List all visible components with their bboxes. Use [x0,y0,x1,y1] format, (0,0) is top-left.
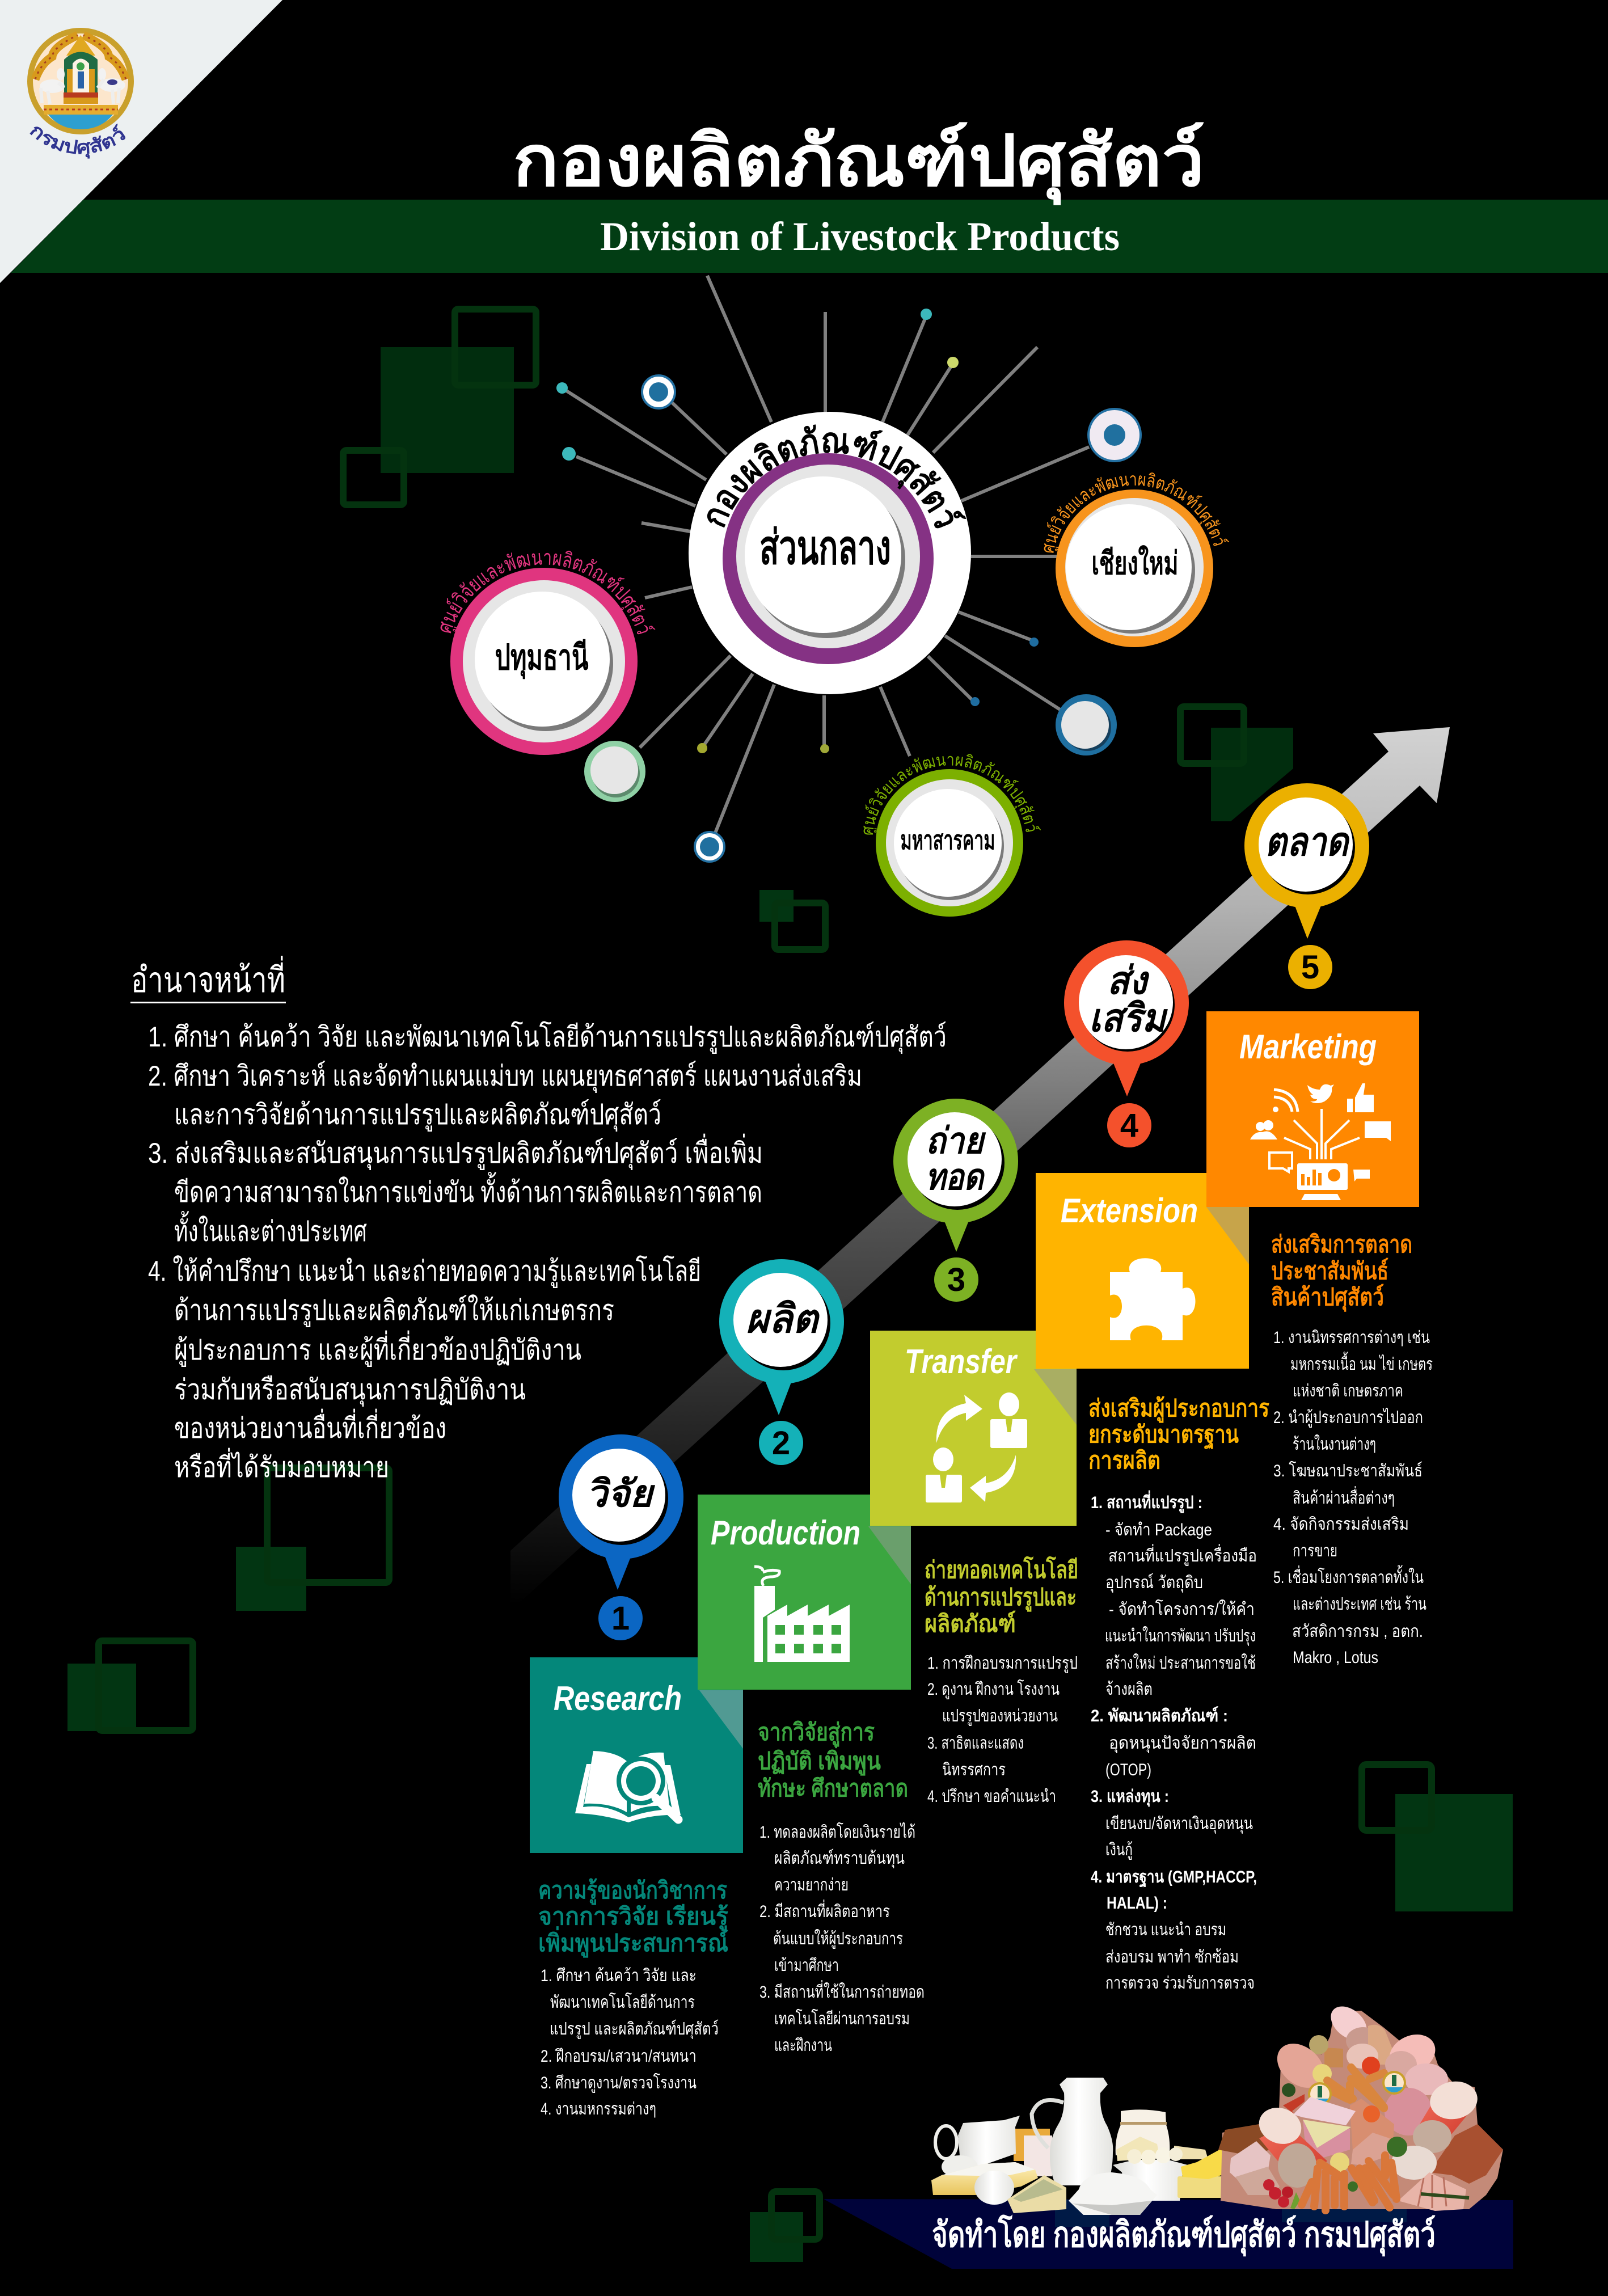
centre: Chiang Mai [1044,472,1230,647]
centre: Maha Sarakham: มหาสารคาม [901,825,995,855]
extension list: (OTOP) [1105,1761,1151,1779]
production heading: ทักษะ ศึกษาตลาด [758,1775,908,1801]
extension list: 1. สถานที่แปรรูป : [1091,1490,1202,1513]
production list: ผลิตภัณฑ์ทราบต้นทุน [774,1848,905,1869]
extension list: ชักชวน แนะนำ อบรม [1105,1921,1226,1939]
production list: เทคโนโลยีผ่านการอบรม [774,2008,910,2028]
centre: Chiang Mai: ศูนย์วิจัยและพัฒนาผลิตภัณฑ์ปศุสัตว์ [1044,472,1230,553]
transfer list: 4. ปรึกษา ขอคำแนะนำ [927,1787,1056,1806]
centre: Pathum Thani [440,550,656,755]
duties list: ขีดความสามารถในการแข่งขัน ทั้งด้านการผลิตและการตลาด [174,1172,762,1208]
footer credit: จัดทำโดย กองผลิตภัณฑ์ปศุสัตว์ กรมปศุสัตว์ [932,2214,1436,2256]
transfer list: 2. ดูงาน ฝึกงาน โรงงาน [927,1679,1060,1699]
logo caption: กรมปศุสัตว์ [29,124,126,159]
duties section [130,956,947,1483]
extension list: - จัดทำโครงการ/ให้คำ [1109,1599,1255,1619]
duties list: ของหน่วยงานอื่นที่เกี่ยวข้อง [174,1409,446,1444]
logo: Department of Livestock Development crest [27,28,134,159]
production list: 3. มีสถานที่ใช้ในการถ่ายทอด [759,1980,925,2002]
extension list: สถานที่แปรรูปเครื่องมือ [1108,1544,1257,1566]
transfer list [927,1654,1078,1806]
step card: Extension: Extension [1061,1192,1198,1230]
marketing list: สินค้าผ่านสื่อต่างๆ [1293,1486,1395,1508]
research heading: จากการวิจัย เรียนรู้ [538,1903,728,1931]
footer banner [824,2199,1513,2269]
production list: 1. ทดลองผลิตโดยเงินรายได้ [759,1822,915,1842]
production list: ความยากง่าย [774,1876,849,1894]
pin 4: extension: เสริม [1089,997,1168,1040]
duties list: 2. ศึกษา วิเคราะห์ และจัดทำแผนแม่บท แผนยุทธศาสตร์ แผนงานส่งเสริม [148,1060,862,1093]
duties list: ด้านการแปรรูปและผลิตภัณฑ์ให้แก่เกษตรกร [174,1294,614,1327]
centre: Maha Sarakham: ศูนย์วิจัยและพัฒนาผลิตภัณฑ์ปศุสัตว์ [863,754,1041,835]
meat: silhouette [1221,2011,1503,2209]
extension list: สร้างใหม่ ประสานการขอใช้ [1105,1653,1256,1673]
step card: Production [698,1495,911,1690]
duties list: หรือที่ได้รับมอบหมาย [174,1448,389,1483]
duties heading [130,956,286,1003]
extension list: ส่งอบรม พาทำ ซักซ้อม [1105,1948,1239,1966]
extension heading: ส่งเสริมผู้ประกอบการ [1088,1395,1269,1423]
step card: Transfer [870,1331,1077,1526]
duties list: 4. ให้คำปรึกษา แนะนำ และถ่ายทอดความรู้และเทคโนโลยี [148,1255,701,1288]
step card: Research [530,1657,743,1853]
centre: Pathum Thani: ปทุมธานี [495,638,589,679]
marketing list: ร้านในงานต่างๆ [1293,1434,1376,1454]
duties list [148,1021,947,1483]
research list: 4. งานมหกรรมต่างๆ [541,2100,656,2118]
step card: Research: Research [554,1679,682,1717]
extension list: อุดหนุนปัจจัยการผลิต [1109,1734,1256,1754]
image: processed meat products [1218,1999,1503,2211]
pin 5: marketing: 5 [1301,949,1319,986]
extension heading: ยกระดับมาตรฐาน [1088,1421,1239,1450]
production heading: จากวิจัยสู่การ [758,1719,875,1747]
extension list: - จัดทำ Package [1105,1521,1212,1539]
pin 2: production: ผลิต [746,1297,820,1341]
transfer text [925,1556,1078,1806]
production list: เข้ามาศึกษา [774,1956,839,1975]
extension list: เขียนงบ/จัดหาเงินอุดหนุน [1105,1814,1253,1834]
extension list [1091,1490,1257,1993]
marketing list: และต่างประเทศ เช่น ร้าน [1293,1595,1426,1614]
marketing list: 2. นำผู้ประกอบการไปออก [1273,1407,1423,1428]
centre: Chiang Mai: เชียงใหม่ [1091,545,1179,581]
marketing heading: ส่งเสริมการตลาด [1271,1231,1412,1257]
duties list: 1. ศึกษา ค้นคว้า วิจัย และพัฒนาเทคโนโลยีด้านการแปรรูปและผลิตภัณฑ์ปศุสัตว์ [148,1021,947,1054]
meat: middle layer [1230,2078,1503,2195]
extension list: แนะนำในการพัฒนา ปรับปรุง [1105,1626,1256,1647]
icon: puzzle piece [1110,1258,1196,1340]
icon: social media network [1250,1083,1391,1200]
hub network: end dots [556,309,1141,862]
centre: Pathum Thani: ศูนย์วิจัยและพัฒนาผลิตภัณฑ์ปศุสัตว์ [440,550,656,634]
transfer heading [925,1556,1078,1637]
marketing list: แห่งชาติ เกษตรภาค [1293,1382,1403,1400]
image: dairy products [931,2078,1238,2215]
research list: 3. ศึกษาดูงาน/ตรวจโรงงาน [541,2073,697,2093]
pin 3: transfer: ถ่าย [926,1120,986,1161]
marketing list: สวัสดิการกรม , อตก. [1292,1622,1423,1641]
extension text [1088,1395,1269,1993]
pin 1: research: วิจัย [586,1472,655,1514]
pin 2: production: 2 [772,1425,790,1462]
duties list: 3. ส่งเสริมและสนับสนุนการแปรรูปผลิตภัณฑ์ปศุสัตว์ เพื่อเพิ่ม [148,1134,763,1170]
pin 4: extension [1064,940,1189,1147]
research heading [538,1877,728,1958]
production list: ต้นแบบให้ผู้ประกอบการ [773,1929,903,1949]
marketing heading [1271,1231,1412,1312]
marketing heading: ประชาสัมพันธ์ [1271,1257,1388,1284]
extension list: 3. แหล่งทุน : [1091,1787,1169,1807]
production list [759,1822,925,2055]
production list: 2. มีสถานที่ผลิตอาหาร [759,1900,890,1921]
pin 3: transfer: ทอด [926,1157,985,1197]
hub centre label: ส่วนกลาง [759,521,891,574]
pin 2: production [719,1259,844,1465]
duties heading: อำนาจหน้าที่ [131,956,285,1000]
pin 4: extension: 4 [1120,1107,1138,1144]
duties list: ผู้ประกอบการ และผู้ที่เกี่ยวข้องปฏิบัติงาน [174,1331,581,1367]
step card: Transfer: Transfer [905,1343,1018,1381]
icon: factory [754,1567,850,1662]
production heading [758,1719,908,1801]
icon: book and magnifier [575,1751,681,1822]
extension list: 4. มาตรฐาน (GMP,HACCP, [1091,1868,1257,1888]
pin 1: research: 1 [611,1600,630,1637]
marketing list: 4. จัดกิจกรรมส่งเสริม [1273,1515,1409,1534]
duties list: และการวิจัยด้านการแปรรูปและผลิตภัณฑ์ปศุสัตว์ [174,1099,661,1132]
pin 5: marketing: ตลาด [1265,820,1350,864]
marketing heading: สินค้าปศุสัตว์ [1271,1284,1384,1312]
step card: Extension [1036,1173,1249,1369]
extension list: อุปกรณ์ วัตถุดิบ [1105,1573,1203,1593]
transfer heading: ถ่ายทอดเทคโนโลยี [925,1556,1078,1583]
transfer heading: ผลิตภัณฑ์ [925,1610,1016,1637]
hub: central division [689,412,971,694]
extension heading: การผลิต [1088,1447,1160,1474]
title banner [11,200,1608,273]
extension heading [1088,1395,1269,1474]
meat: rear layer [1218,1999,1448,2155]
research text [538,1877,728,2118]
extension list: HALAL) : [1107,1894,1167,1913]
step card: Marketing [1206,1011,1419,1207]
transfer list: แปรรูปของหน่วยงาน [942,1707,1058,1726]
header corner panel [0,0,282,283]
transfer list: 1. การฝึกอบรมการแปรรูป [927,1654,1078,1673]
hub curved label: กองผลิตภัณฑ์ปศุสัตว์ [707,424,967,529]
transfer list: นิทรรศการ [942,1761,1006,1779]
duties list: ทั้งในและต่างประเทศ [174,1211,367,1247]
marketing list: 1. งานนิทรรศการต่างๆ เช่น [1273,1328,1430,1347]
marketing list: Makro , Lotus [1293,1648,1378,1667]
extension list: 2. พัฒนาผลิตภัณฑ์ : [1091,1706,1228,1725]
decorative green squares [67,309,1513,2262]
step card: Marketing: Marketing [1239,1028,1377,1066]
title: กองผลิตภัณฑ์ปศุสัตว์ [513,122,1205,205]
pin 3: transfer: 3 [947,1261,965,1298]
extension list: เงินกู้ [1105,1841,1133,1860]
pin 1: research [559,1434,683,1640]
marketing list: การขาย [1293,1542,1337,1560]
growth arrow [510,727,1450,1611]
marketing list: 3. โฆษณาประชาสัมพันธ์ [1273,1461,1423,1480]
research heading: ความรู้ของนักวิชาการ [538,1877,727,1905]
hub network: spokes [565,276,1089,834]
pin 5: marketing [1244,783,1369,989]
transfer heading: ด้านการแปรรูปและ [925,1584,1077,1612]
pin 4: extension: ส่ง [1107,959,1149,1002]
research heading: เพิ่มพูนประสบการณ์ [538,1926,728,1958]
meat: front layer [1263,2155,1469,2211]
subtitle: Division of Livestock Products [600,214,1120,259]
research list: 1. ศึกษา ค้นคว้า วิจัย และ [541,1966,697,1985]
marketing text [1271,1231,1433,1667]
extension list: การตรวจ ร่วมรับการตรวจ [1105,1974,1255,1993]
pin 3: transfer [893,1099,1018,1302]
icon: knowledge exchange [926,1392,1027,1502]
marketing list [1273,1328,1433,1667]
research list: 2. ฝึกอบรม/เสวนา/สนทนา [541,2047,697,2066]
marketing list: มหกรรมเนื้อ นม ไข่ เกษตร [1290,1352,1433,1374]
research list: พัฒนาเทคโนโลยีด้านการ [550,1992,695,2012]
step card: Production: Production [711,1514,860,1552]
production heading: ปฏิบัติ เพิ่มพูน [758,1744,881,1776]
transfer list: 3. สาธิตและแสดง [927,1734,1024,1753]
extension list: จ้างผลิต [1105,1680,1153,1699]
production list: และฝึกงาน [774,2036,832,2055]
research list: แปรรูป และผลิตภัณฑ์ปศุสัตว์ [550,2019,719,2040]
centre: Maha Sarakham [863,754,1041,917]
marketing list: 5. เชื่อมโยงการตลาดทั้งใน [1273,1565,1424,1587]
duties list: ร่วมกับหรือสนับสนุนการปฏิบัติงาน [174,1374,526,1407]
production text [758,1719,925,2055]
research list [541,1966,719,2118]
